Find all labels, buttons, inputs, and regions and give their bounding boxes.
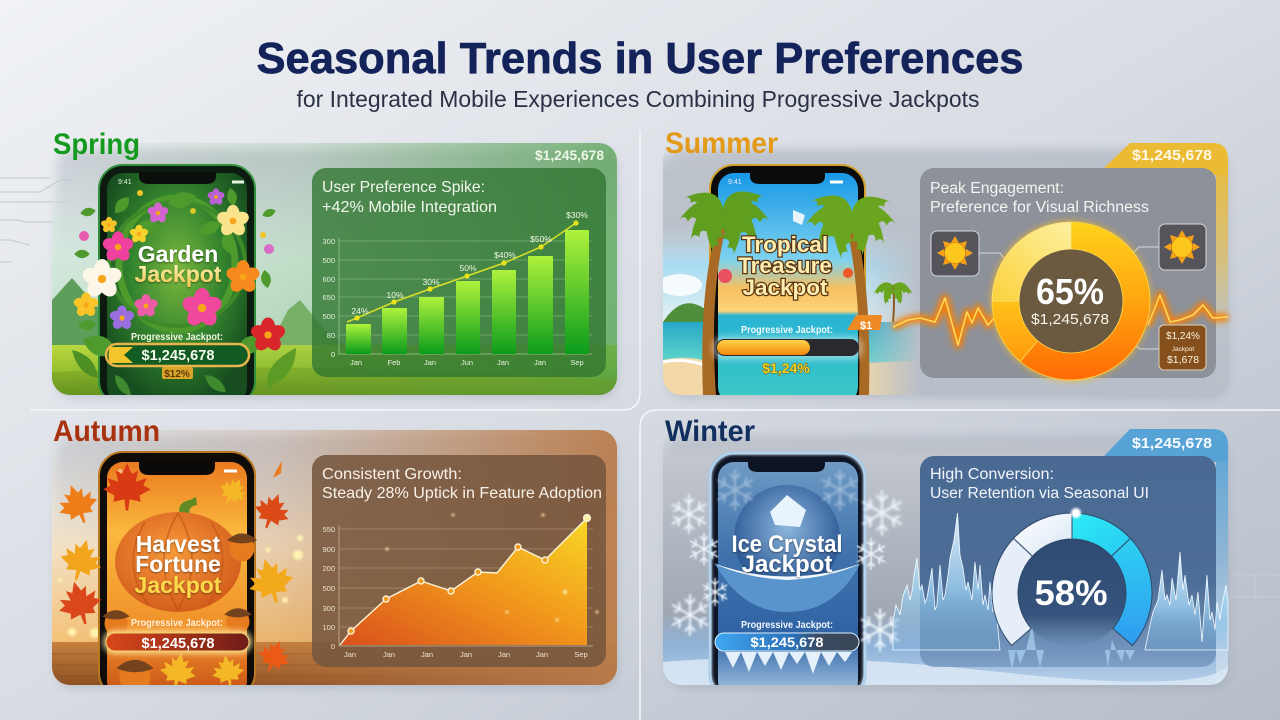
panel: winter: [663, 429, 1228, 698]
gold percent badge: $12%: [164, 369, 190, 380]
x axis labels: Jan: [534, 358, 546, 367]
harvest fortune name: Harvest: [136, 531, 221, 557]
y axis labels: 0: [331, 350, 335, 359]
panel heading: [930, 466, 1149, 502]
panel heading: High Conversion:: [930, 466, 1054, 483]
heading: winter: Winter: [665, 415, 755, 448]
jackpot progress pill: $1,245,678: [142, 347, 214, 364]
panel heading: User Preference Spike:: [322, 179, 485, 196]
mini stat box: $1,678: [1167, 354, 1199, 366]
tropical treasure name: Jackpot: [742, 275, 828, 300]
autumn chart panel: [312, 455, 606, 667]
y axis labels: 500: [322, 256, 335, 265]
ice crystal name: Jackpot: [742, 551, 832, 578]
harvest fortune name: [135, 531, 222, 598]
ice crystal name: Ice Crystal: [732, 531, 842, 558]
x axis labels: Jan: [344, 650, 356, 659]
x axis labels: Sep: [574, 650, 588, 659]
trend labels: $40%: [494, 250, 516, 260]
garden jackpot name: Jackpot: [135, 261, 222, 287]
spring jackpot total: $1,245,678: [535, 148, 604, 163]
pulse line: [893, 295, 1228, 345]
icon: sun right: [1159, 224, 1206, 270]
jackpot pill: $1,245,678: [142, 636, 214, 652]
y axis labels: 300: [322, 237, 335, 246]
y axis labels: 550: [322, 525, 335, 534]
x axis labels: Jan: [350, 358, 362, 367]
gauge chart: [992, 508, 1152, 647]
donut value: 65%: [1036, 271, 1104, 312]
y axis labels: 200: [322, 564, 335, 573]
gold percent badge: [162, 367, 193, 380]
y axis labels: 900: [322, 545, 335, 554]
gold amount: $1,24%: [762, 360, 810, 376]
progressive jackpot label: Progressive Jackpot:: [131, 618, 223, 629]
panel heading: Preference for Visual Richness: [930, 199, 1149, 216]
x axis labels: Jun: [461, 358, 473, 367]
garden jackpot name: [135, 241, 222, 287]
phone: harvest fortune jackpot: 9:41: [118, 469, 132, 476]
summer chart panel: [893, 168, 1228, 382]
jackpot bar: [715, 633, 859, 651]
palm crown left: [679, 192, 770, 255]
heading: autumn: Autumn: [53, 415, 160, 448]
orange ribbon: $1: [860, 320, 872, 332]
harvest fortune name: Fortune: [135, 551, 221, 577]
jackpot progress bar: [712, 336, 863, 360]
panel heading: +42% Mobile Integration: [322, 199, 497, 216]
trend labels: $50%: [530, 234, 552, 244]
progressive jackpot label: Progressive Jackpot:: [131, 332, 223, 343]
gauge value: 58%: [1034, 574, 1108, 613]
donut chart: [990, 220, 1152, 382]
small palm: [874, 282, 912, 322]
ice crystal name: [732, 531, 842, 578]
icicles: [725, 652, 852, 674]
tab: summer jackpot: [1104, 143, 1228, 175]
panel heading: Consistent Growth:: [322, 466, 462, 483]
x axis labels: Jan: [460, 650, 472, 659]
panel heading: [322, 179, 497, 216]
bar chart: [346, 230, 589, 354]
panel: autumn: [52, 430, 617, 697]
tropical treasure name: [738, 232, 832, 300]
icon: sun left: [931, 231, 979, 276]
phone: tropical treasure jackpot: 9:41: [728, 179, 742, 186]
trend labels: [351, 210, 588, 316]
y axis labels: [322, 525, 335, 651]
x axis labels: Jan: [536, 650, 548, 659]
phone: harvest fortune jackpot: [52, 452, 299, 697]
panel heading: [322, 466, 602, 502]
spring chart panel: [312, 168, 606, 377]
jackpot bar: $1,245,678: [750, 634, 824, 650]
phone: garden jackpot: 9:41: [118, 179, 132, 186]
x axis labels: Jan: [497, 358, 509, 367]
mini stat box: Jackpot: [1172, 346, 1194, 353]
y axis labels: 80: [327, 331, 335, 340]
y axis labels: 600: [322, 275, 335, 284]
garden jackpot name: Garden: [138, 241, 218, 267]
panel: spring: [52, 143, 617, 405]
y axis labels: 300: [322, 604, 335, 613]
y axis labels: 100: [322, 623, 335, 632]
x axis labels: Sep: [570, 358, 584, 367]
trend labels: $30%: [566, 210, 588, 220]
panel heading: [930, 180, 1149, 216]
x axis labels: Feb: [388, 358, 400, 367]
orange ribbon: [847, 315, 882, 332]
subtitle: for Integrated Mobile Experiences Combining Progressive Jackpots: [296, 86, 980, 112]
y axis labels: 0: [331, 642, 335, 651]
jackpot pill: [103, 630, 252, 654]
progressive jackpot label: Progressive Jackpot:: [741, 620, 833, 631]
x axis labels: Jan: [498, 650, 510, 659]
tab: winter jackpot: $1,245,678: [1132, 435, 1212, 452]
y axis labels: 500: [322, 312, 335, 321]
x axis labels: [344, 650, 588, 659]
trend labels: 30%: [422, 277, 440, 287]
panel heading: Peak Engagement:: [930, 180, 1064, 197]
phone: ice crystal jackpot: [673, 453, 901, 698]
tab: winter jackpot: [1104, 429, 1228, 462]
phone: garden jackpot: [72, 165, 296, 405]
trend labels: 24%: [351, 306, 369, 316]
harvest fortune name: Jackpot: [135, 572, 222, 598]
palm crown right: [806, 196, 896, 260]
progressive jackpot label: Progressive Jackpot:: [741, 325, 833, 336]
tropical treasure name: Treasure: [738, 253, 832, 278]
trend labels: 10%: [386, 290, 404, 300]
panel heading: User Retention via Seasonal UI: [930, 485, 1149, 502]
jackpot progress pill: [106, 344, 249, 366]
y axis labels: [322, 237, 335, 359]
y axis labels: 650: [322, 293, 335, 302]
x axis labels: Jan: [424, 358, 436, 367]
donut amount: $1,245,678: [1031, 311, 1109, 328]
y axis labels: 500: [322, 584, 335, 593]
x axis labels: Jan: [383, 650, 395, 659]
mini stat box: $1,24%: [1166, 331, 1200, 342]
x axis labels: [350, 358, 584, 367]
tab: summer jackpot: $1,245,678: [1132, 147, 1212, 164]
ice spike chart: [893, 513, 1228, 670]
phone: tropical treasure jackpot: [678, 165, 915, 405]
x axis labels: Jan: [421, 650, 433, 659]
trend labels: 50%: [459, 263, 477, 273]
heading: spring: Spring: [53, 128, 140, 161]
area chart: [340, 515, 590, 645]
title: Seasonal Trends in User Preferences: [256, 34, 1024, 83]
mini stat box: [1159, 325, 1206, 370]
tropical treasure name: Tropical: [742, 232, 828, 257]
panel: summer: [658, 143, 1228, 405]
heading: summer: Summer: [665, 127, 778, 160]
panel heading: Steady 28% Uptick in Feature Adoption: [322, 485, 602, 502]
trend line: [347, 220, 579, 322]
winter chart panel: [893, 456, 1228, 670]
